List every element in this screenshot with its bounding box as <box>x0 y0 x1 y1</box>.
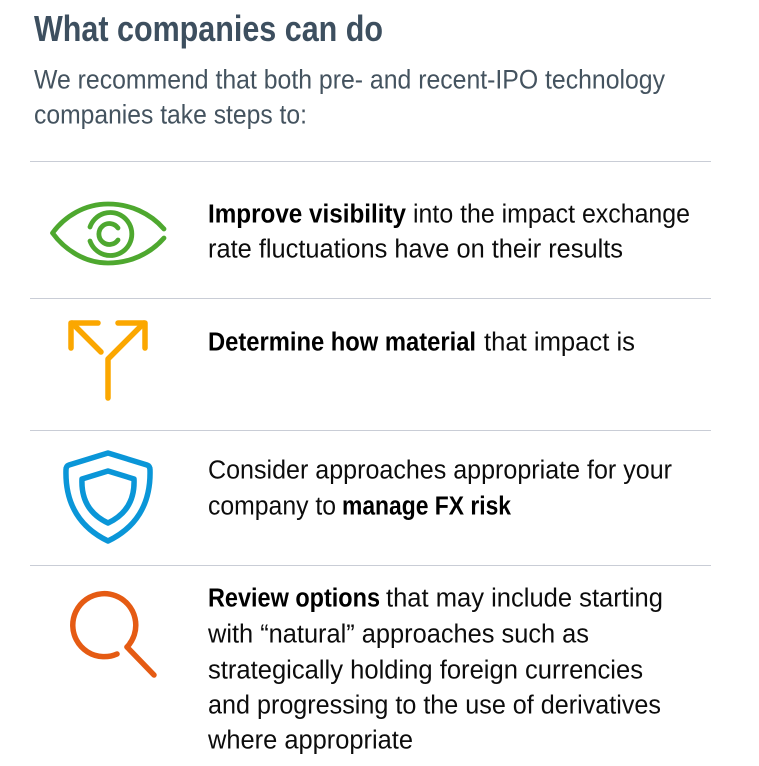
text: review options: and progressing to the use of derivatives <box>208 692 661 720</box>
text: improve visibility <box>208 200 690 264</box>
panel: improve visibility <box>52 200 690 264</box>
text: review options: with “natural” approaches such as <box>207 620 589 648</box>
panel: review options <box>73 584 663 754</box>
icon: diverging arrows <box>71 323 145 398</box>
text: manage FX risk: manage FX risk <box>342 492 512 520</box>
text: review options: where appropriate <box>207 726 413 754</box>
title: What companies can do <box>34 8 383 49</box>
text: determine materiality: Determine how material <box>208 328 476 356</box>
intro text: companies take steps to: <box>34 100 307 130</box>
icon: eye <box>52 204 164 263</box>
text: review options <box>207 584 663 754</box>
text: review options: strategically holding foreign currencies <box>208 656 643 684</box>
panel: manage FX risk <box>66 453 672 541</box>
intro text: We recommend that both pre- and recent-IPO technology <box>34 64 666 94</box>
text: determine materiality: that impact is <box>484 328 635 356</box>
text: manage FX risk: Consider approaches appropriate for your <box>208 456 672 484</box>
icon: magnifying glass <box>73 594 154 675</box>
text: review options: Review options <box>208 584 380 612</box>
icon: shield <box>66 453 150 541</box>
text: manage FX risk: company to <box>208 492 336 520</box>
text: improve visibility: Improve visibility <box>208 200 407 228</box>
text: manage FX risk <box>208 456 672 520</box>
text: improve visibility: rate fluctuations have on their results <box>208 236 623 264</box>
text: improve visibility: into the impact exchange <box>413 200 690 228</box>
panel: determine materiality <box>71 323 635 398</box>
text: review options: that may include starting <box>386 584 663 612</box>
intro text <box>34 64 666 130</box>
text: determine materiality <box>208 328 635 356</box>
